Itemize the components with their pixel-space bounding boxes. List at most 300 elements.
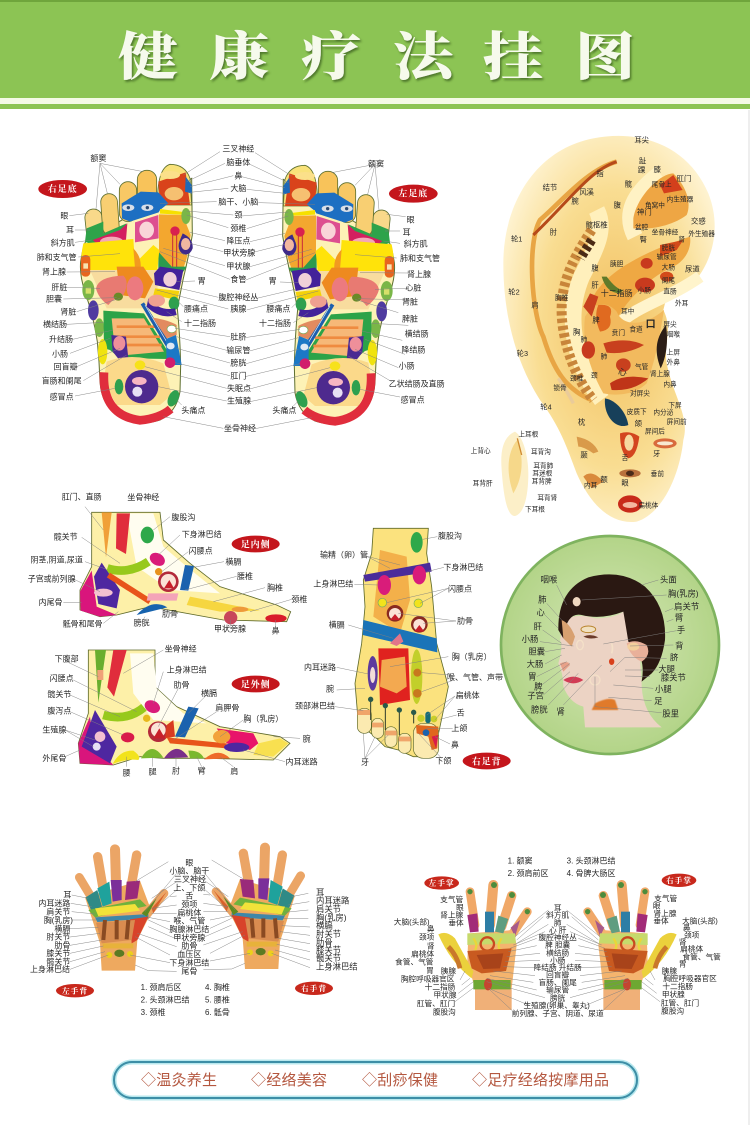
labels: dorsal foot: 鼻 <box>451 740 459 750</box>
labels: ear points: 锁骨 <box>553 383 567 392</box>
labels: ear points: 气管 <box>635 362 649 371</box>
labels: ear points: 额 <box>600 475 608 484</box>
medial foot illustration <box>63 507 292 628</box>
labels: ear points: 肾 <box>678 235 685 244</box>
labels: lateral foot: 臂 <box>198 765 206 775</box>
labels: medial foot: 子宫或前列腺 <box>28 574 76 584</box>
labels: dorsal foot: 上颌 <box>451 723 467 733</box>
panel: ear chart <box>471 136 715 522</box>
legend: back of hand: 6. 骶骨 <box>205 1007 230 1017</box>
labels: center column: 喉、气管 <box>173 916 205 926</box>
labels: dorsal foot: 舌 <box>457 707 465 717</box>
labels: face points <box>522 575 699 718</box>
labels: palm center column: 膀胱 <box>550 992 566 1002</box>
badge: right back <box>295 982 333 995</box>
labels: face points: 脾 <box>534 682 543 692</box>
labels: medial foot: 肛门、直肠 <box>62 491 102 501</box>
title: 挂 <box>483 29 543 87</box>
badge: right sole: 右足底 <box>48 183 78 194</box>
labels: sole zones: 肾脏 <box>60 306 76 316</box>
labels: face points: 股里 <box>662 708 679 718</box>
labels: ear points: 耳尖 <box>634 136 650 145</box>
labels: left column: 膝关节 <box>46 948 70 958</box>
labels: face points: 子宫 <box>527 691 544 701</box>
labels: ear points: 轮4 <box>540 402 552 411</box>
labels: left palm column: 肾 <box>427 941 435 950</box>
labels: face points: 肝 <box>533 622 542 632</box>
labels: ear points: 颈 <box>591 371 598 379</box>
labels: center column: 上、下颌 <box>173 883 205 893</box>
legend: back of hand: 4. 胸椎 <box>205 982 230 992</box>
labels: lateral foot: 腕 <box>303 733 311 743</box>
labels: ear points: 尿道 <box>685 265 700 274</box>
labels: center column: 肋骨 <box>181 941 197 951</box>
labels: face points: 臂 <box>675 612 683 622</box>
labels: center column: 尾骨 <box>181 967 197 976</box>
labels: ear points: 神门 <box>637 207 652 216</box>
labels: right palm column: 肾 <box>679 937 687 946</box>
labels: ear back: 耳背肝 <box>473 479 493 488</box>
labels: sole zones: 坐骨神经 <box>224 423 256 433</box>
panel: foot soles chart <box>37 143 445 433</box>
labels: ear points: 颈椎 <box>570 374 584 383</box>
labels: ear back: 耳背脾 <box>532 476 552 485</box>
labels: left column: 肘关节 <box>46 932 70 942</box>
header banner <box>0 0 750 109</box>
labels: palm center column: 回盲瓣 <box>546 970 569 980</box>
labels: lateral foot: 肘 <box>172 766 180 775</box>
badge: left back: 左手背 <box>62 985 88 995</box>
labels: palm center column: 斜方肌 <box>546 910 569 920</box>
labels: right column: 肩关节 <box>316 904 341 914</box>
labels: palm center column: 腹腔神经丛 <box>539 932 577 942</box>
large ear illustration <box>503 136 715 522</box>
labels: right column: 内耳迷路 <box>316 896 350 906</box>
labels: dorsal foot <box>295 531 503 767</box>
badge: dorsal: 右足背 <box>472 755 502 766</box>
labels: medial foot: 髋关节 <box>54 531 78 541</box>
labels: right palm column: 大脑(头部) <box>682 916 718 926</box>
labels: ear back: 上背心 <box>471 446 491 455</box>
labels: ear points: 肩 <box>531 301 539 310</box>
legend: palm: 1. 额窦 <box>508 855 533 865</box>
labels: medial foot: 横膈 <box>225 556 241 566</box>
labels: left column <box>30 891 73 974</box>
labels: lateral foot: 闪腰点 <box>50 674 74 683</box>
labels: sole zones: 头痛点 <box>272 405 296 415</box>
labels: face points: 足 <box>654 696 663 706</box>
labels: medial foot: 坐骨神经 <box>127 492 159 502</box>
labels: sole zones: 失眠点 <box>227 383 251 393</box>
labels: sole zones: 鼻 <box>234 170 242 180</box>
labels: ear points: 腹 <box>614 201 622 210</box>
labels: dorsal foot: 扁桃体 <box>456 690 480 700</box>
labels: ear points: 膝 <box>654 165 662 174</box>
badge: left sole <box>389 185 438 203</box>
labels: right column: 膝关节 <box>316 945 341 955</box>
footer pill: ◇刮痧保健 <box>362 1072 438 1089</box>
labels: right column: 胸(乳房) <box>316 912 347 922</box>
title: 健 <box>118 29 178 87</box>
labels: sole zones: 斜方肌 <box>51 237 75 247</box>
labels: medial foot: 腹股沟 <box>171 512 195 522</box>
labels: left palm column: 胃 <box>426 966 434 975</box>
labels: face points: 胃 <box>528 672 537 682</box>
right foot sole <box>63 152 233 428</box>
labels: right palm column: 食管、气管 <box>683 951 721 961</box>
labels: ear points: 上屏 <box>667 348 680 357</box>
legend: back of hand <box>141 982 230 1017</box>
right back of hand <box>203 848 310 970</box>
labels: left palm column: 胸腔呼吸器官区 <box>401 974 455 984</box>
labels: ear points: 外生殖器 <box>688 229 715 238</box>
title: 法 <box>393 30 459 87</box>
labels: ear points: 牙 <box>653 449 660 458</box>
labels: ear back: 耳背沟 <box>531 447 551 456</box>
labels: left palm column: 腹股沟 <box>433 1006 456 1016</box>
labels: sole zones: 脾脏 <box>402 313 418 323</box>
labels: left palm column: 颈项 <box>419 933 435 942</box>
labels: sole zones: 颈椎 <box>230 223 246 233</box>
labels: ear points: 肛门 <box>677 174 691 183</box>
labels: right palm column: 肛管、肛门 <box>661 997 699 1007</box>
labels: ear points: 屏间后 <box>645 426 665 435</box>
labels: sole zones: 眼 <box>407 215 415 224</box>
labels: ear points: 皮质下 <box>627 407 647 416</box>
labels: ear points: 颌 <box>635 419 643 428</box>
labels: sole zones: 盲肠和阑尾 <box>42 375 82 385</box>
labels: center column: 三叉神经 <box>174 874 206 884</box>
right edge strip <box>748 110 750 1125</box>
labels: dorsal foot: 内耳迷路 <box>304 662 336 672</box>
labels: lateral foot: 坐骨神经 <box>165 643 197 653</box>
labels: sole zones: 甲状腺 <box>226 261 250 271</box>
labels: dorsal foot: 上身淋巴结 <box>313 579 353 589</box>
labels: ear points: 腕 <box>571 196 579 205</box>
labels: face points: 大腿 <box>658 664 676 674</box>
labels: sole zones: 胰腺 <box>230 304 246 314</box>
labels: center column: 颈项 <box>181 900 197 909</box>
labels: lateral foot: 肋骨 <box>174 680 190 690</box>
labels: lateral foot: 髋关节 <box>47 689 71 699</box>
labels: face points: 肩关节 <box>674 602 699 612</box>
labels: ear points: 输尿管 <box>657 252 677 261</box>
labels: dorsal foot: 腹股沟 <box>438 531 462 541</box>
footer pill: ◇温灸养生 <box>141 1072 217 1089</box>
labels: ear points: 大肠 <box>662 262 675 271</box>
labels: palm center column: 横结肠 <box>546 947 569 957</box>
title: 康 <box>209 28 269 87</box>
labels: medial foot: 闪腰点 <box>189 547 213 556</box>
labels: sole zones: 肺和支气管 <box>400 253 440 263</box>
title: 图 <box>575 30 635 87</box>
labels: sole zones: 耳 <box>66 226 74 235</box>
labels: ear points: 下屏 <box>668 402 682 410</box>
labels: ear points: 肺 <box>601 352 608 360</box>
legend: palm: 4. 骨脾大肠区 <box>567 868 615 878</box>
left back of hand <box>70 849 177 971</box>
badge: right palm <box>662 874 696 887</box>
labels: face points: 小肠 <box>522 634 538 644</box>
panel: back of hands chart <box>30 848 358 1017</box>
left foot sole <box>242 153 412 429</box>
labels: right palm column: 眼 <box>653 902 661 911</box>
labels: sole zones: 腰痛点 <box>266 303 290 313</box>
labels: sole zones: 心脏 <box>405 282 421 292</box>
labels: face points: 手 <box>677 625 685 635</box>
labels: ear points: 脾 <box>592 316 600 325</box>
labels: face points: 胆囊 <box>528 647 545 657</box>
labels: right palm column <box>653 893 721 1016</box>
labels: center column: 血压区 <box>177 949 201 959</box>
labels: face points: 脐 <box>670 653 679 663</box>
labels: center column: 下身淋巴结 <box>169 957 209 967</box>
small ear back illustration <box>501 432 528 516</box>
labels: ear points: 心 <box>618 367 627 377</box>
labels: sole zones: 膀胱 <box>230 358 246 368</box>
legend: back of hand: 5. 腰椎 <box>205 995 230 1005</box>
labels: palm center column: 肺 <box>554 918 562 927</box>
labels: sole zones: 甲状旁腺 <box>223 247 255 257</box>
labels: sole zones: 升结肠 <box>49 334 73 344</box>
labels: ear points: 轮2 <box>508 287 520 296</box>
labels: palm center column: 盲肠、阑尾 <box>539 977 577 987</box>
labels: sole zones: 颈 <box>234 211 242 220</box>
labels: sole zones <box>37 143 445 433</box>
labels: lateral foot: 内耳迷路 <box>286 757 318 767</box>
labels: dorsal foot: 颈部淋巴结 <box>295 701 335 711</box>
labels: center column: 甲状旁腺 <box>173 932 205 942</box>
legend: back of hand: 1. 颈肩后区 <box>141 982 181 992</box>
labels: lateral foot: 腹泻点 <box>47 706 71 716</box>
labels: palm center column: 耳 <box>554 903 562 912</box>
labels: dorsal foot: 喉、气管、声带 <box>447 672 503 682</box>
labels: sole zones: 腰痛点 <box>184 303 208 313</box>
labels: face points: 肺 <box>538 594 547 604</box>
badge: left palm: 左手掌 <box>429 878 455 888</box>
labels: sole zones: 眼 <box>60 211 68 220</box>
labels: right palm column: 颈项 <box>684 930 700 939</box>
labels: ear points: 十二指肠 <box>601 288 633 298</box>
labels: lateral foot: 腿 <box>149 768 157 777</box>
legend: palm: 2. 颈肩前区 <box>508 868 548 878</box>
labels: sole zones: 胆囊 <box>46 294 62 304</box>
labels: left palm column: 大脑(头部) <box>394 916 430 926</box>
labels: dorsal foot: 输精（卵）管 <box>320 550 368 560</box>
green circle background <box>501 536 719 754</box>
labels: ear points: 结节 <box>543 183 557 192</box>
labels: lateral foot: 横膈 <box>201 688 217 698</box>
labels: ear points: 肺 <box>581 336 588 344</box>
labels: sole zones: 胃 <box>198 277 206 286</box>
labels: left palm column: 十二指肠 <box>425 982 456 992</box>
labels: sole zones: 感冒点 <box>50 391 74 401</box>
labels: sole zones: 脑干、小脑 <box>218 196 258 206</box>
labels: ear points: 内鼻 <box>663 379 677 388</box>
labels: right palm column: 肾上腺 <box>654 908 677 918</box>
labels: right palm column: 垂体 <box>653 915 669 925</box>
labels: center column: 扁桃体 <box>177 907 201 917</box>
footer pill <box>114 1062 637 1098</box>
labels: face points: 肾 <box>556 707 565 717</box>
left palm <box>438 882 548 1012</box>
labels: face points: 心 <box>536 607 545 617</box>
labels: ear points: 内生殖器 <box>667 195 694 204</box>
badge: dorsal <box>463 753 511 769</box>
labels: left palm column: 肾上腺 <box>440 910 463 920</box>
labels: medial foot: 鼻 <box>272 625 280 635</box>
labels: ear points: 小肠 <box>638 286 651 295</box>
labels: right palm column: 十二指肠 <box>662 981 693 991</box>
labels: ear points: 耳中 <box>621 306 634 315</box>
badge: right palm: 右手掌 <box>666 875 692 885</box>
labels: dorsal foot: 腕 <box>326 684 334 694</box>
legend: back of hand: 3. 颈椎 <box>141 1007 166 1017</box>
labels: ear points: 枕 <box>578 417 586 426</box>
labels: dorsal foot: 肋骨 <box>457 616 473 626</box>
labels: lateral foot: 腰 <box>123 768 131 777</box>
labels: sole zones: 降结肠 <box>401 344 425 354</box>
labels: left palm column: 食管、气管 <box>395 957 434 967</box>
labels: ear points: 口 <box>646 319 656 330</box>
labels: sole zones: 回盲瓣 <box>54 362 78 372</box>
labels: ear points: 外鼻 <box>667 358 680 367</box>
labels: ear back: 下耳根 <box>525 504 545 513</box>
labels: medial foot: 甲状旁腺 <box>214 624 246 634</box>
footer pill: ◇经络美容 <box>251 1072 327 1089</box>
labels: right palm column: 甲状腺 <box>662 989 685 999</box>
labels: dorsal foot: 横膈 <box>329 620 345 630</box>
lateral foot illustration <box>65 650 300 767</box>
labels: ear points: 贲门 <box>612 328 625 337</box>
labels: palm center column: 小肠 <box>550 956 566 965</box>
badge: lateral: 足外侧 <box>241 678 271 689</box>
labels: palm center column: 前列腺、子宫、阴道、尿道 <box>512 1008 604 1018</box>
labels: face points: 膝关节 <box>661 672 686 682</box>
legend: back of hand: 2. 头颈淋巴结 <box>141 995 189 1005</box>
labels: right column: 肘关节 <box>316 929 341 939</box>
labels: left palm column: 扁桃体 <box>411 949 434 959</box>
panel: foot side charts <box>28 491 318 777</box>
labels: sole zones: 横结肠 <box>43 319 67 329</box>
labels: left column: 上身淋巴结 <box>30 964 70 974</box>
labels: right column <box>316 887 358 971</box>
labels: center column: 舌 <box>185 891 193 901</box>
labels: face points: 膀胱 <box>531 704 548 714</box>
labels: ear points: 扁桃体 <box>638 500 659 509</box>
labels: palm center column: 降结肠 升结肠 <box>534 962 582 972</box>
labels: sole zones: 肾脏 <box>402 296 418 306</box>
labels: sole zones: 肛门 <box>230 370 246 380</box>
labels: center column <box>169 858 209 976</box>
labels: left palm column: 肛管、肛门 <box>417 998 455 1008</box>
labels: face points: 胸(乳房) <box>668 588 699 598</box>
labels: palm center column: 输尿管 <box>546 985 569 995</box>
panel: face chart <box>501 536 719 754</box>
labels: ear points: 坐骨神经 <box>652 228 679 237</box>
labels: left column: 胸(乳房) <box>44 915 73 925</box>
labels: sole zones: 输尿管 <box>226 345 250 355</box>
labels: face points: 小腿 <box>655 684 672 694</box>
labels: ear points: 颞 <box>580 451 588 460</box>
head illustration <box>537 574 677 727</box>
labels: left column: 耳 <box>63 891 71 900</box>
labels: ear points: 角窝中 <box>645 200 665 209</box>
badge: left palm <box>424 876 459 890</box>
labels: dorsal foot: 胸（乳房） <box>452 651 492 661</box>
labels: center column: 小脑、脑干 <box>169 866 209 876</box>
labels: ear points: 舌 <box>622 453 629 462</box>
labels: sole zones: 降压点 <box>226 235 250 245</box>
labels: face points: 咽喉 <box>541 575 558 585</box>
labels: ear points: 交感 <box>691 216 706 225</box>
labels: sole zones: 头痛点 <box>181 405 205 415</box>
labels: ear points: 眼 <box>621 478 629 487</box>
labels: ear points: 踝 <box>638 166 646 175</box>
labels: right palm column: 胃 <box>679 960 686 969</box>
footer pill: ◇足疗经络按摩用品 <box>472 1071 609 1089</box>
labels: ear points: 垂前 <box>651 469 664 478</box>
labels: face points: 背 <box>675 641 684 651</box>
labels: sole zones: 腹腔神经丛 <box>218 292 258 302</box>
labels: left column: 肩关节 <box>46 906 70 916</box>
labels: ear points: 膀胱 <box>662 243 675 252</box>
labels: sole zones: 胃 <box>269 277 277 286</box>
labels: sole zones: 三叉神经 <box>222 143 254 153</box>
badge: medial <box>232 536 280 552</box>
labels: lateral foot <box>42 643 318 777</box>
labels: lateral foot: 生殖腺 <box>42 725 66 735</box>
labels: ear points: 轮3 <box>517 349 528 358</box>
badge: right sole <box>38 180 87 198</box>
labels: ear points: 肝 <box>591 281 599 290</box>
labels: palm center column: 生殖腺(卵巢、睾丸) <box>523 1000 590 1010</box>
panel: palms chart <box>394 855 721 1018</box>
labels: right column: 肋骨 <box>316 937 333 947</box>
labels: ear points: 阑尾 <box>662 276 675 285</box>
labels: sole zones: 食管 <box>230 274 246 284</box>
badge: left sole: 左足底 <box>398 188 428 199</box>
labels: sole zones: 生殖腺 <box>227 396 251 406</box>
labels: right palm column: 胰腺 <box>662 965 677 975</box>
labels: ear back <box>471 429 558 513</box>
labels: sole zones: 耳 <box>403 228 411 237</box>
labels: ear points: 食道 <box>629 325 643 334</box>
labels: ear points: 尾骨上 <box>652 180 672 189</box>
labels: sole zones: 小肠 <box>52 349 68 358</box>
labels: left palm column: 垂体 <box>448 918 464 928</box>
labels: face points: 大肠 <box>527 659 543 669</box>
labels: sole zones: 脑垂体 <box>226 157 250 167</box>
badge: medial: 足内侧 <box>241 538 271 549</box>
labels: ear back: 耳背肾 <box>537 493 558 502</box>
labels: left column: 内耳迷路 <box>38 898 70 908</box>
labels: ear points: 肾上腺 <box>650 369 670 378</box>
labels: sole zones: 肾上腺 <box>407 269 431 279</box>
foot top illustration <box>335 528 457 758</box>
labels: ear points: 胰胆 <box>610 259 624 268</box>
labels: left palm column: 胰腺 <box>441 966 456 976</box>
labels: left column: 横膈 <box>54 923 70 933</box>
labels: palm center column <box>512 903 604 1018</box>
labels: ear points: 对屏尖 <box>630 389 650 398</box>
labels: ear points: 咽喉 <box>667 329 680 338</box>
right palm <box>567 882 677 1012</box>
labels: right palm column: 鼻 <box>683 922 691 932</box>
labels: left palm column: 甲状腺 <box>434 990 457 1000</box>
labels: lateral foot: 胸（乳房） <box>243 713 283 723</box>
labels: lateral foot: 下腹部 <box>55 654 79 664</box>
